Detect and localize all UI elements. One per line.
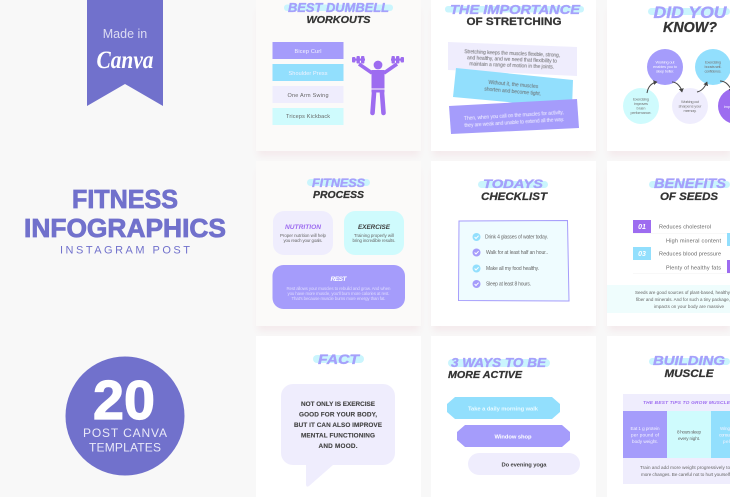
badge: 20 post canva templates: POST CANVA: [83, 426, 167, 440]
item: walk: Walk for at least half an hour..: [486, 250, 548, 256]
item: healthy food: Make all my food healthy.: [486, 266, 539, 272]
box: nutrition: [273, 211, 333, 255]
ribbon: made in canva: Canva: [96, 47, 154, 74]
table: muscle tips: Eat 1 g protein: [630, 426, 660, 431]
badge: 20 post canva templates: 20: [93, 369, 155, 431]
icon: person lifting dumbbells: [352, 56, 404, 113]
heading: todays checklist: [478, 177, 548, 203]
ribbon: made in canva: Made in: [103, 27, 147, 41]
table: muscle tips: consu: [719, 432, 730, 438]
heading: benefits of seeds: OF SEEDS: [660, 191, 719, 203]
main title: [24, 186, 226, 256]
heading: best dumbell workouts: [284, 1, 393, 26]
table: muscle tips: every night.: [678, 436, 700, 441]
text band: seeds note: [607, 285, 730, 313]
table: muscle tips: Train and add more weight progressively to: [640, 465, 730, 470]
item: drink water: Drink 4 glasses of water today.: [485, 234, 548, 240]
list: seed benefits: High mineral content: [666, 238, 721, 244]
list: seed benefits: Reduces cholesterol: [659, 224, 711, 230]
heading: 3 ways: [448, 356, 550, 381]
arrow: to first circle: [647, 82, 657, 93]
note: flexibility: maintain a range of motion in the joints.: [469, 61, 554, 71]
option: morning walk: Take a daily morning walk: [468, 406, 539, 412]
heading: importance of stretching: OF STRETCHING: [466, 16, 562, 28]
option: morning walk: [447, 397, 560, 419]
speech bubble: [281, 384, 395, 487]
arrow: to confidence circle: [697, 82, 707, 92]
speech bubble: MENTAL FUNCTIONING: [301, 432, 375, 440]
diagram: connected facts: brain: [636, 106, 646, 110]
note: weak muscles: [449, 99, 579, 134]
list: seed benefits: Reduces blood pressure: [659, 252, 721, 258]
text band: seeds note: fiber and minerals. And for such a tiny package,: [636, 297, 730, 302]
box: rest: REST: [330, 276, 348, 283]
note: flexibility: Stretching keeps the muscles flexible, strong,: [464, 49, 560, 59]
box: nutrition: Proper nutrition will help: [280, 233, 327, 238]
heading: building muscle: BUILDING: [653, 353, 725, 368]
heading: fitness process: [307, 178, 370, 201]
badge: 20 post canva templates: TEMPLATES: [89, 440, 161, 454]
heading: fitness process: PROCESS: [313, 189, 364, 201]
option: evening yoga: [468, 453, 580, 475]
diagram: connected facts: imp: [724, 104, 730, 109]
list: seed benefits: 01: [638, 224, 646, 231]
heading: fact: [313, 352, 364, 367]
heading: fitness process: FITNESS: [312, 178, 365, 190]
text band: seeds note: Seeds are good sources of plant-based, healthy: [635, 290, 730, 295]
diagram: connected facts: enables you to: [653, 64, 678, 69]
list: seed benefits: 03: [638, 251, 646, 258]
diagram: connected facts: Exercising: [705, 60, 721, 64]
ribbon: made in canva: [87, 0, 163, 106]
heading: best dumbell workouts: BEST DUMBELL: [288, 1, 389, 15]
speech bubble: NOT ONLY IS EXERCISE: [301, 401, 376, 408]
list: workouts: Triceps Kickback: [286, 114, 330, 120]
option: window shop: Window shop: [494, 434, 532, 440]
table: muscle tips: pel: [723, 439, 730, 444]
text band: seeds note: impacts on your body are massive: [654, 304, 724, 309]
heading: importance of stretching: [445, 3, 584, 28]
table: muscle tips: Wing: [720, 426, 730, 431]
arrow: to memory circle: [672, 82, 682, 92]
list: workouts: Bicep Curl: [294, 49, 322, 55]
heading: 3 ways: MORE ACTIVE: [448, 369, 523, 381]
diagram: connected facts: boosts self-: [704, 64, 722, 69]
box: exercise: bring incredible results.: [352, 238, 396, 243]
table: muscle tips: per pound of: [631, 432, 660, 438]
option: evening yoga: Do evening yoga: [502, 462, 547, 468]
diagram: connected facts: Working out: [681, 99, 700, 104]
panel: did you know: [607, 0, 730, 151]
list: workouts: One Arm Swing: [288, 93, 328, 99]
note: flexibility: and healthy, and we need that flexibility to: [467, 55, 557, 65]
box: exercise: Training properly will: [354, 233, 394, 238]
list: workouts: Shoulder Press: [288, 71, 328, 77]
note: muscles shorten: [453, 68, 573, 108]
heading: best dumbell workouts: WORKOUTS: [306, 14, 370, 26]
panel: todays checklist: [431, 161, 596, 326]
main title: INFOGRAPHICS: [24, 215, 226, 243]
box: rest: That's because muscle burns more energy than fat.: [292, 296, 386, 301]
note: muscles shorten: Without it, the muscles: [488, 80, 539, 90]
table: muscle tips: 8 hours sleep: [677, 430, 701, 434]
heading: building muscle: [649, 353, 730, 380]
checklist box: [458, 220, 569, 301]
diagram: connected facts: memory.: [684, 108, 696, 113]
heading: benefits of seeds: [649, 176, 730, 203]
badge: 20 post canva templates: [66, 356, 184, 476]
heading: todays checklist: TODAYS: [483, 177, 543, 191]
diagram: connected facts: sleep better.: [656, 68, 674, 74]
panel: best dumbell workouts: [256, 0, 421, 151]
panel: building muscle: [607, 336, 730, 497]
box: nutrition: you reach your goals.: [284, 238, 322, 243]
box: rest: [272, 265, 405, 309]
box: rest: Rest allows your muscles to rebuild and grow. And when: [286, 286, 391, 291]
list: workouts: [272, 42, 344, 125]
box: rest: you have more muscle, you'll burn more calories at rest.: [288, 291, 390, 296]
heading: did you know: DID YOU: [654, 3, 727, 22]
speech bubble: AND MOOD.: [318, 443, 358, 450]
box: exercise: EXERCISE: [358, 224, 391, 231]
note: muscles shorten: shorten and become tight.: [484, 87, 541, 97]
list: seed benefits: [633, 220, 730, 274]
diagram: connected facts: confidence.: [704, 68, 722, 74]
diagram: connected facts: performance.: [630, 110, 652, 115]
heading: importance of stretching: THE IMPORTANCE: [450, 3, 581, 17]
heading: 3 ways: 3 WAYS TO BE: [451, 356, 547, 370]
item: sleep: Sleep at least 8 hours.: [486, 282, 531, 288]
heading: fact: FACT: [318, 352, 361, 367]
box: nutrition: NUTRITION: [285, 224, 321, 231]
speech bubble: GOOD FOR YOUR BODY,: [299, 412, 377, 418]
card shadows: [258, 10, 730, 331]
diagram: connected facts: Exercising: [633, 96, 649, 102]
note: weak muscles: they are weak and unable to extend all the way.: [464, 117, 564, 129]
heading: did you know: KNOW?: [663, 20, 717, 36]
diagram: connected facts: improves: [634, 101, 648, 106]
option: window shop: [457, 425, 570, 447]
table: muscle tips: body weight.: [632, 439, 658, 444]
box: exercise: [344, 211, 404, 255]
heading: did you know: [648, 3, 730, 36]
heading: todays checklist: CHECKLIST: [481, 191, 548, 203]
heading: benefits of seeds: BENEFITS: [654, 176, 726, 191]
table: muscle tips: [623, 394, 730, 484]
speech bubble: BUT IT CAN ALSO IMPROVE: [294, 422, 383, 429]
table: muscle tips: more changes. Be careful not to hurt yourself: [641, 472, 730, 477]
note: flexibility: [448, 42, 577, 76]
heading: building muscle: MUSCLE: [664, 368, 714, 380]
diagram: connected facts: sharpens your: [678, 104, 702, 108]
main title: INSTAGRAM POST: [60, 244, 190, 256]
diagram: connected facts: [623, 49, 730, 124]
diagram: connected facts: Working out: [656, 60, 675, 64]
list: seed benefits: Plenty of healthy fats: [666, 266, 721, 272]
panel: fitness process: [256, 161, 421, 326]
main title: FITNESS: [72, 186, 178, 214]
panel: 3 ways to be more active: [431, 336, 596, 497]
panel: the importance of stretching: [431, 0, 596, 151]
arrow: to last circle: [720, 81, 730, 92]
note: weak muscles: Then, when you call on the muscles for activity,: [464, 110, 564, 122]
panel: benefits of seeds: [607, 161, 730, 326]
table: muscle tips: THE BEST TIPS TO GROW MUSCLE: [643, 400, 730, 406]
panel: fact: [256, 336, 421, 497]
